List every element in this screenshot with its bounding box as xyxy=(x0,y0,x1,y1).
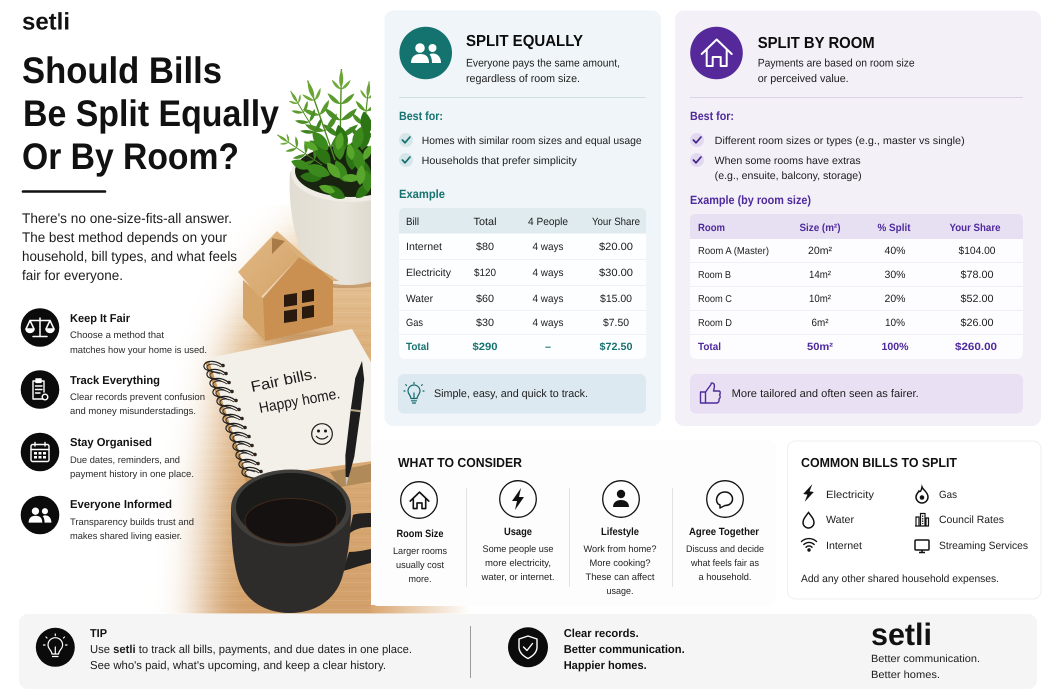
row: room d: 6m² xyxy=(812,317,829,329)
callout: fairer: More tailored and often seen as fairer. xyxy=(732,388,919,400)
description xyxy=(758,58,915,85)
feature: everyone informed: Transparency builds trust and xyxy=(70,517,194,528)
item: room size: Larger rooms xyxy=(393,546,447,557)
main title: Or By Room? xyxy=(22,136,239,177)
best for list xyxy=(690,109,965,182)
row: room a xyxy=(698,245,996,257)
row: water: $15.00 xyxy=(600,293,632,305)
item: room size: more. xyxy=(408,574,432,585)
slogan: Happier homes. xyxy=(564,660,647,672)
row: total: $260.00 xyxy=(955,341,997,353)
item: usage: more electricity, xyxy=(485,558,551,569)
feature: track everything: Clear records prevent confusion xyxy=(70,392,205,403)
bill: internet xyxy=(802,539,862,552)
best for list: Different room sizes or types (e.g., master vs single) xyxy=(715,135,965,147)
bill: electricity xyxy=(802,483,875,503)
feature: everyone informed: Everyone Informed xyxy=(70,499,172,511)
bill: water: Water xyxy=(826,514,854,526)
intro paragraph: household, bill types, and what feels xyxy=(22,248,237,264)
item: room size: usually cost xyxy=(396,560,444,571)
row: total: – xyxy=(545,341,551,353)
row: internet: 4 ways xyxy=(532,241,564,253)
panel: split by room xyxy=(675,10,1041,426)
row: electricity: Electricity xyxy=(406,267,452,279)
row: room b: Room B xyxy=(698,270,731,281)
main title xyxy=(22,50,279,177)
header row xyxy=(406,216,640,228)
panel: split equally xyxy=(384,10,661,426)
item: agree together: a household. xyxy=(698,572,752,583)
row: room c: 20% xyxy=(884,293,906,305)
main title: Be Split Equally xyxy=(23,93,279,134)
slogan: Clear records. xyxy=(564,628,639,640)
row: total: 100% xyxy=(882,341,909,353)
header row: Your Share xyxy=(950,222,1001,234)
row: gas: 4 ways xyxy=(532,317,564,329)
icon: calendar xyxy=(21,433,59,471)
slogan: Better communication. xyxy=(564,644,685,656)
item: room size xyxy=(393,482,447,585)
header row xyxy=(698,222,1001,234)
best for list: When some rooms have extras xyxy=(715,155,861,167)
example heading: Example (by room size) xyxy=(690,193,811,207)
heading: SPLIT BY ROOM xyxy=(758,35,875,52)
intro paragraph: There's no one-size-fits-all answer. xyxy=(22,210,232,226)
bill: streaming services: Streaming Services xyxy=(939,540,1028,552)
row: internet: $80 xyxy=(476,241,494,253)
bill: council rates: Council Rates xyxy=(939,514,1004,526)
table: room split xyxy=(690,214,1023,359)
row: total: Total xyxy=(698,341,721,353)
bill: gas xyxy=(916,487,957,503)
bill: electricity: Electricity xyxy=(826,489,875,501)
feature: keep it fair xyxy=(21,308,207,356)
feature: keep it fair: Choose a method that xyxy=(70,330,164,341)
description: or perceived value. xyxy=(758,73,849,85)
best for list: Best for: xyxy=(399,109,443,123)
row: water: 4 ways xyxy=(532,293,564,305)
best for list: Homes with similar room sizes and equal usage xyxy=(422,135,642,147)
item: lifestyle: Lifestyle xyxy=(601,526,639,538)
header row: Bill xyxy=(406,216,419,228)
intro paragraph: fair for everyone. xyxy=(22,267,123,283)
feature: track everything xyxy=(21,370,205,417)
row: total: $72.50 xyxy=(600,341,633,353)
feature: stay organised: Due dates, reminders, and xyxy=(70,455,180,466)
row: internet: $20.00 xyxy=(599,241,633,253)
slogan xyxy=(564,628,685,672)
row: total xyxy=(698,341,997,353)
spiral notebook xyxy=(204,329,380,487)
table: equal split xyxy=(399,208,646,359)
panel: common bills to split xyxy=(788,441,1041,599)
row: water xyxy=(406,293,632,305)
footer logo xyxy=(871,617,980,681)
feature: stay organised: payment history in one place. xyxy=(70,469,194,480)
smiley face xyxy=(312,424,332,444)
item: lifestyle: usage. xyxy=(606,586,634,597)
icon: people xyxy=(21,496,59,534)
icon: tip bulb xyxy=(36,628,75,667)
intro paragraph xyxy=(22,210,237,283)
best for list: Households that prefer simplicity xyxy=(422,155,577,167)
row: room c xyxy=(698,293,994,305)
row: gas xyxy=(406,317,629,329)
item: usage xyxy=(481,481,554,583)
row: room a: 20m² xyxy=(808,245,832,257)
icon: scales xyxy=(21,308,59,347)
item: lifestyle: More cooking? xyxy=(590,558,650,569)
bill: council rates xyxy=(915,514,1004,526)
description xyxy=(466,58,620,85)
row: room a: 40% xyxy=(884,245,906,257)
header row: Room xyxy=(698,222,725,234)
tip text xyxy=(90,628,412,672)
best for list: Best for: xyxy=(690,109,734,123)
pen xyxy=(345,361,364,486)
row: room c: $52.00 xyxy=(960,293,994,305)
row: gas: $7.50 xyxy=(603,317,629,329)
row: room d: $26.00 xyxy=(960,317,994,329)
plant pot xyxy=(290,144,371,288)
item: agree together: Discuss and decide xyxy=(686,544,764,555)
wooden table xyxy=(170,208,371,614)
row: room d: Room D xyxy=(698,318,732,329)
feature: everyone informed: makes shared living easier. xyxy=(70,531,182,542)
row: room b: $78.00 xyxy=(960,269,994,281)
brand logo: setli xyxy=(22,8,70,36)
row: internet xyxy=(406,241,633,253)
row: total: 50m² xyxy=(807,341,834,353)
best for list xyxy=(399,109,642,167)
row: internet: Internet xyxy=(406,241,442,253)
row: electricity: $120 xyxy=(474,267,496,279)
bill: gas: Gas xyxy=(939,489,957,501)
handwritten note: Fair bills. xyxy=(249,365,318,396)
plant leaves xyxy=(277,69,371,199)
wood strip under consider panel xyxy=(371,605,471,614)
header row: Size (m²) xyxy=(800,222,840,234)
row: water: Water xyxy=(406,293,433,305)
row: gas: $30 xyxy=(476,317,494,329)
row: total xyxy=(406,341,633,353)
note: Add any other shared household expenses. xyxy=(801,573,999,585)
wooden house model xyxy=(238,231,342,343)
item: usage: Some people use xyxy=(482,544,554,555)
coffee mug xyxy=(231,470,375,613)
callout: fairer xyxy=(690,374,1023,414)
handwritten note: Happy home. xyxy=(258,385,341,417)
heading: COMMON BILLS TO SPLIT xyxy=(801,455,957,470)
item: agree together: Agree Together xyxy=(689,526,759,538)
row: electricity xyxy=(406,267,633,279)
header row: % Split xyxy=(878,222,911,234)
bill: water xyxy=(803,512,854,528)
item: agree together: what feels fair as xyxy=(690,558,759,569)
feature: everyone informed xyxy=(21,496,194,542)
row: room a: $104.00 xyxy=(958,245,996,257)
handwritten note xyxy=(251,370,340,413)
row: room c: 10m² xyxy=(809,293,831,305)
bill: internet: Internet xyxy=(826,540,862,552)
description: Payments are based on room size xyxy=(758,58,915,70)
header row: 4 People xyxy=(528,216,568,228)
feature: keep it fair: Keep It Fair xyxy=(70,313,130,325)
icon: bulb xyxy=(404,382,424,403)
row: room a: Room A (Master) xyxy=(698,246,769,257)
tip text: See who's paid, what's upcoming, and keep a clear history. xyxy=(90,660,386,672)
header row: Total xyxy=(474,216,496,228)
row: room b xyxy=(698,269,994,281)
description: Everyone pays the same amount, xyxy=(466,58,620,70)
row: room c: Room C xyxy=(698,294,732,305)
backing panel behind comparison cards xyxy=(371,0,1056,433)
item: lifestyle: These can affect xyxy=(586,572,655,583)
example heading: Example xyxy=(399,187,445,201)
item: lifestyle xyxy=(584,481,656,597)
item: usage: water, or internet. xyxy=(481,572,554,583)
row: gas: Gas xyxy=(406,317,423,329)
footer logo: setli xyxy=(871,617,932,652)
row: room d: 10% xyxy=(885,317,905,329)
icon: purple house xyxy=(690,27,743,79)
tip text: TIP xyxy=(90,628,107,640)
callout: simple xyxy=(398,374,646,414)
intro paragraph: The best method depends on your xyxy=(22,229,227,245)
row: total: $290 xyxy=(472,341,498,353)
icon: clipboard xyxy=(21,370,59,409)
item: agree together xyxy=(686,481,764,583)
row: room b: 14m² xyxy=(809,269,831,281)
item: lifestyle: Work from home? xyxy=(584,544,656,555)
tip text: Use setli to track all bills, payments, and due dates in one place. xyxy=(90,644,412,656)
heading: WHAT TO CONSIDER xyxy=(398,455,523,470)
row: electricity: $30.00 xyxy=(599,267,633,279)
callout: simple: Simple, easy, and quick to track. xyxy=(434,388,588,400)
feature: stay organised: Stay Organised xyxy=(70,437,152,449)
row: water: $60 xyxy=(476,293,494,305)
feature: stay organised xyxy=(21,433,194,480)
description: regardless of room size. xyxy=(466,73,580,85)
row: room d xyxy=(698,317,994,329)
item: room size: Room Size xyxy=(396,528,444,540)
icon: thumbs up xyxy=(700,383,720,403)
icon: teal people xyxy=(399,27,452,79)
row: electricity: 4 ways xyxy=(532,267,564,279)
heading: SPLIT EQUALLY xyxy=(466,33,583,50)
feature: keep it fair: matches how your home is used. xyxy=(70,345,207,356)
footer logo: Better communication. xyxy=(871,653,980,665)
panel: what to consider xyxy=(371,440,776,606)
footer logo: Better homes. xyxy=(871,669,940,681)
panel: footer tip bar xyxy=(19,614,1037,689)
main title: Should Bills xyxy=(22,50,222,91)
row: total: Total xyxy=(406,341,429,353)
feature: track everything: Track Everything xyxy=(70,375,160,387)
item: usage: Usage xyxy=(504,526,532,538)
best for list: (e.g., ensuite, balcony, storage) xyxy=(715,170,862,182)
header row: Your Share xyxy=(592,216,640,228)
photo scene: desk with plant, house, notebook and mug xyxy=(170,69,371,614)
feature: track everything: and money misunderstadings. xyxy=(70,406,196,417)
row: room b: 30% xyxy=(884,269,906,281)
icon: shield xyxy=(508,627,548,667)
